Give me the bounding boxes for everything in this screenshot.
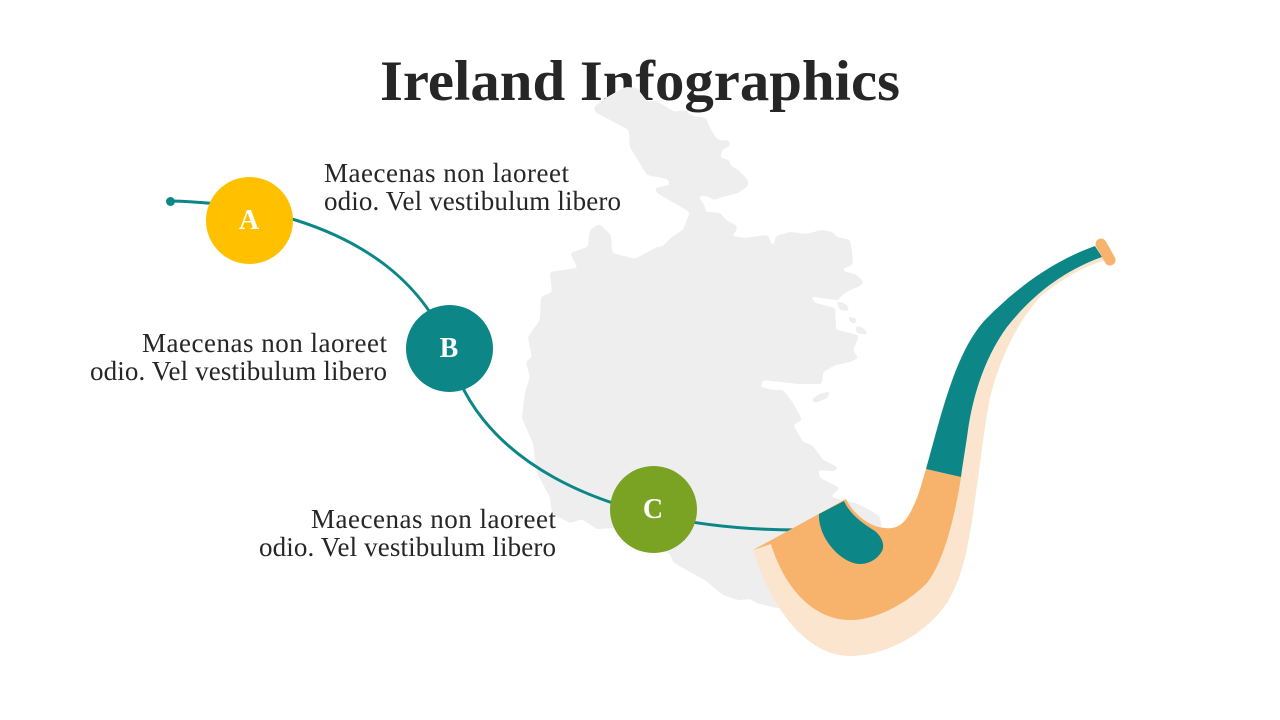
text block B: odio. Vel vestibulum libero [90,356,387,386]
icon: smoking pipe [753,244,1110,656]
text block C: Maecenas non laoreet [311,504,556,534]
circle C [610,466,697,553]
circle B [406,305,493,392]
text block C: odio. Vel vestibulum libero [259,532,556,562]
text block A: odio. Vel vestibulum libero [324,186,621,216]
pipe teal stem [926,246,1102,477]
pipe orange bowl [753,469,961,620]
map of Ireland [522,87,882,608]
pipe mouthpiece [1101,244,1110,260]
title: Ireland Infographics [380,50,900,113]
connector line [170,201,800,530]
letter B: B [440,333,458,364]
letter C: C [643,494,663,525]
circle A [206,177,293,264]
icon: line start dot [166,197,175,206]
item A [206,158,621,264]
item B [90,305,493,392]
pipe bowl opening [819,501,883,564]
letter A: A [239,205,260,236]
text block B: Maecenas non laoreet [142,328,387,358]
pipe outer light body [753,257,1106,656]
text block A: Maecenas non laoreet [324,158,569,188]
item C [259,466,697,562]
